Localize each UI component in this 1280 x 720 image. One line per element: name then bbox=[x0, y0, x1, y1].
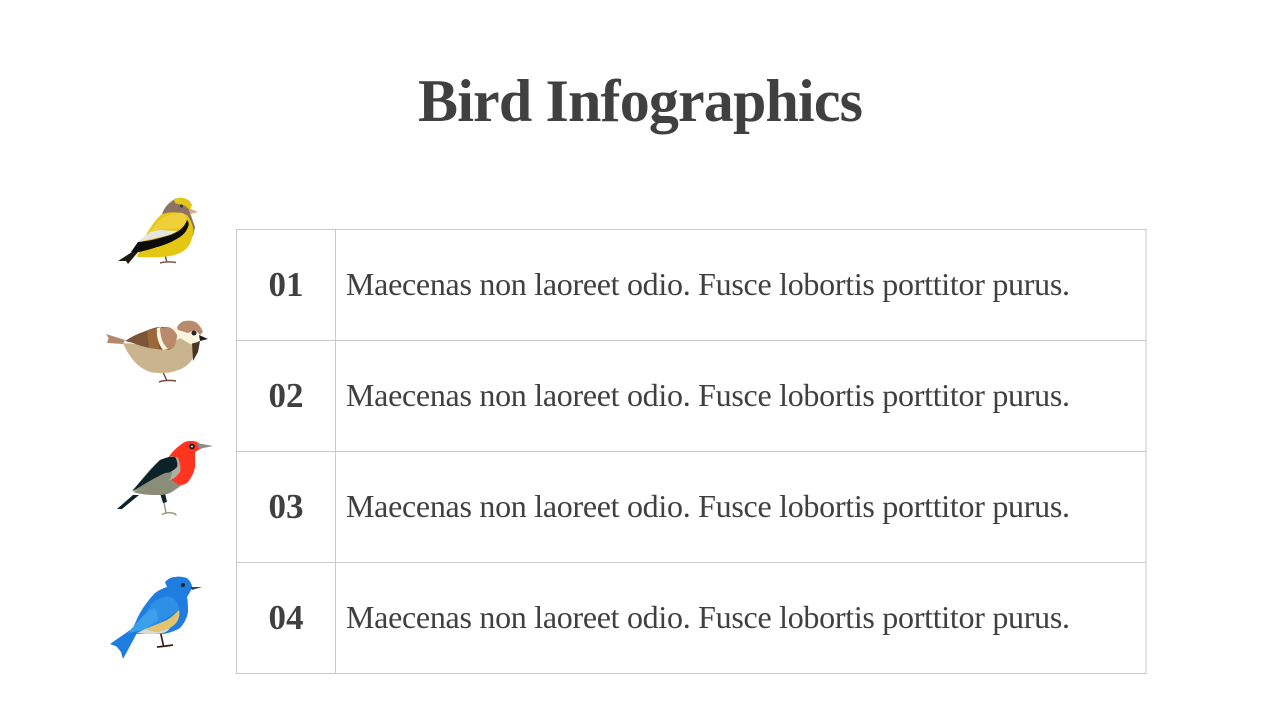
row 02 bbox=[268, 376, 1070, 415]
number 02: 02 bbox=[268, 376, 304, 415]
number 04: 04 bbox=[268, 598, 304, 637]
title: Bird Infographics bbox=[418, 68, 863, 134]
icon: blue bird bbox=[110, 577, 202, 659]
row 04 bbox=[268, 598, 1070, 637]
row 01 text: Maecenas non laoreet odio. Fusce lobortis porttitor purus. bbox=[346, 266, 1070, 302]
number 01: 01 bbox=[268, 265, 304, 304]
row 01 bbox=[268, 265, 1070, 304]
icon: red bird bbox=[117, 441, 213, 516]
icon: yellow bird bbox=[118, 198, 198, 264]
row 02 text: Maecenas non laoreet odio. Fusce lobortis porttitor purus. bbox=[346, 377, 1070, 413]
table bbox=[236, 230, 1146, 674]
number 03: 03 bbox=[268, 487, 304, 526]
row 04 text: Maecenas non laoreet odio. Fusce lobortis porttitor purus. bbox=[346, 599, 1070, 635]
row 03 text: Maecenas non laoreet odio. Fusce lobortis porttitor purus. bbox=[346, 488, 1070, 524]
row 03 bbox=[268, 487, 1070, 526]
icon: sparrow bbox=[106, 321, 208, 382]
